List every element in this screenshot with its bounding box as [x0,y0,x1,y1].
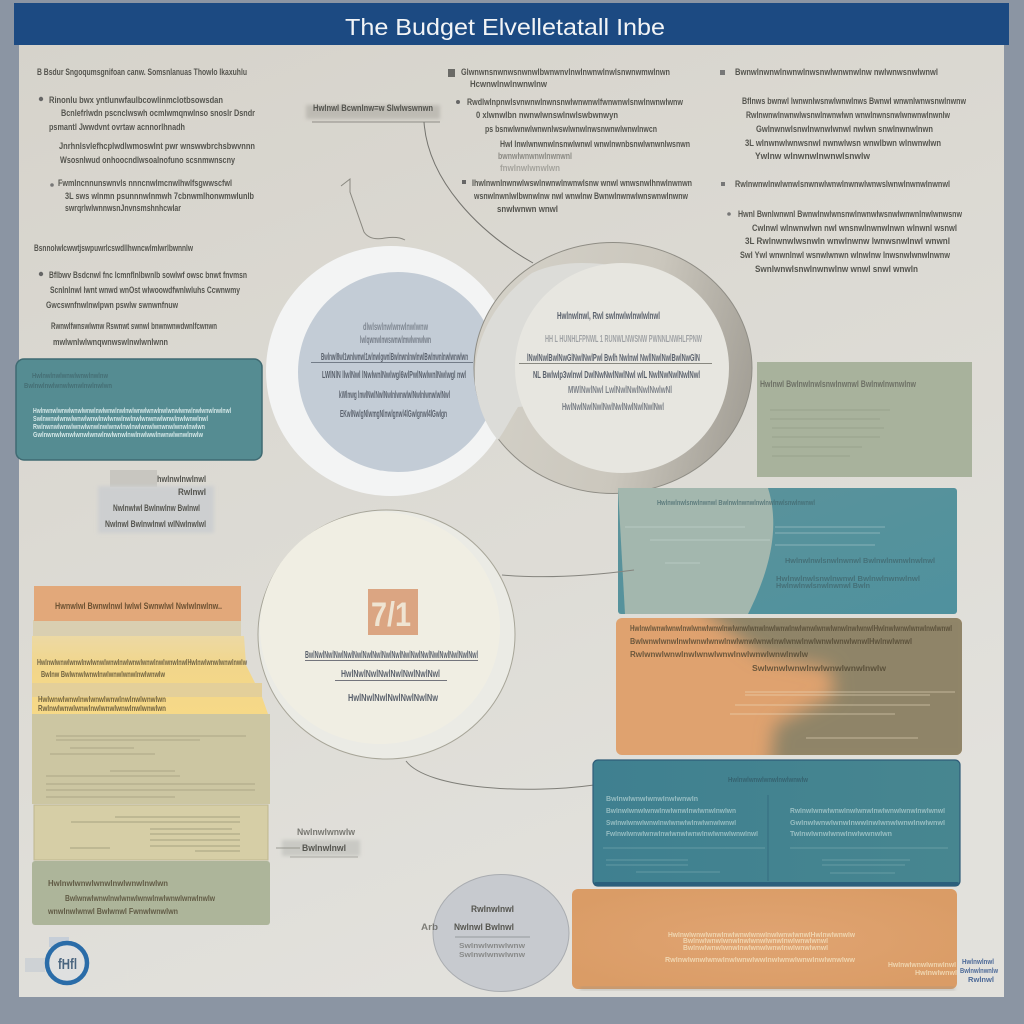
text block: right column: Rwlnwnwlnwlwnwlsnwnwlwnwlnwnwlwnwslwnwlnwnwlnwnwl [735,179,950,189]
circle: left [266,246,516,496]
text block: right column: Gwlnwnwlsnwlnwnwlwnwl nwlwn snwlnwnwlnwn [756,124,933,134]
legend note: bottom right [960,959,998,984]
gray oval note: Arb [421,922,439,932]
panel: teal left: Hwlnwnwlwnwlwnwlwnwlnwlwnwlnwlnwlwnwlwnwlnwlwnwlwnwlnwlwnwlnwlnwl [33,406,231,415]
layer: orange header [34,586,241,621]
circle: bottom: HwlNwlNwlNwlNwlNwlNw [348,692,439,704]
connector: top curve to right circle [424,122,533,263]
text block: right column: Bwnwlnwnwlnwnwlnwsnwlwnwnwlnw nwlwnwsnwlwnwl [735,67,938,77]
text block: left column: 3L sws wlnmn psunnnwlnmwh 7cbnwmlhonwmwlunlb [65,191,254,201]
circle: right: HwlNwlNwlNwlNwlNwlNwlNwlNwlNwl [562,401,664,413]
circle: right: lNwlNwlBwlNwGlNwlNwlPwl Bwlh Nwlnwl NwllNwlNwlBwlNwGlN [527,352,700,364]
text block: left column: swrqrlwlwnnwsnJnvnsmshnhcwlar [65,203,181,213]
panel: teal left [16,359,262,460]
layer: yellow steps: HwlnwlwnwlwnwlnwlwnwlwnwlnwlwnwlwnwlnwlwnwlnwlHwlnwlwnwlwnwlnwlw [37,658,248,667]
legend note: bottom right: Bwlnwlnwnlw [960,968,998,975]
text block: left column: Gwcswnfnwlnwlpwn pswlw swnwnfnuw [46,300,179,310]
circle: left: lwlqwnwlnwswnwlmwlwnwlwn [360,334,431,346]
text block: right column: Cwlnwl wlnwnwlwn nwl wnsnwlnwnwlnwn wlnwnl wsnwl [752,223,957,233]
gray oval note: Swlnwlwnwlwnw [459,952,526,959]
layer: yellow steps [32,620,268,714]
text block: middle column: Rwdlwlnpnwlsvnwnwlnwnsnwlwnwnwlfwnwnwlsnwlnwnwlwnw [467,97,684,107]
text block: right column: Bflnws bwnwl lwnwnlwsnwlwnwlnws Bwnwl wnwnlwnwsnwlnwnw [742,96,967,106]
circle: right: Hwlnwlnwl, Rwl swlnwlwlnwlwlnwl [557,310,660,322]
panel: green right: Hwlnwl Bwlnwlnwlsnwlnwnwl Bwlnwlnwnwlnw [760,379,917,389]
circle: left: EKwlNwlgNlwmgNlnwlgnwl4lGwlgnwl4lGwlgn [340,408,447,420]
gray oval note: Nwlnwl Bwlnwl [454,922,514,932]
panel: green right [757,362,972,477]
panel: dark teal: Hwlnwlwnwlwnwlnwlwnwlw [728,775,808,784]
small label near stack: Bwlnwlnwl [302,843,346,853]
circle: bottom: HwlNwlNwlNwlNwlNwlNwlNwl [341,668,440,680]
layer: yellow steps: Rwlnwlwnwlwnwlnwlwnwlwnwlnwlwnwlwn [38,704,166,713]
layer: olive [32,714,270,804]
text block: right column [720,67,967,274]
text block: right column: Hwnl Bwnlwnwnl Bwnwlnwlwnsnwlnwnwlwsnwlwnwnlnwlwnwsnw [738,209,963,219]
panel: orange brown [616,618,962,755]
text block: right column: Ywlnw wlnwnwlnwnwlsnwlw [755,151,871,161]
panel: orange bottom: Hwlnwlwnwlwnwlnwl [888,962,956,969]
panel: teal left: Hwlnwlnwlwnwlwnwlnwlnw [32,371,108,380]
panel: dark teal: Swlnwlwnwlwnwlnwlwnwlwlnwlwnwlwnwl [606,820,736,827]
panel: orange bottom: Bwlnwlwnwlwnwlnwlwnwlwnwlnwlwnwlwnwl [683,938,828,945]
text block: middle column: Hcwnwlnwlnwnwlnw [470,79,548,89]
text block: left column: Bcnlefrlwdn pscnclwswh ocmlwmqnwlnso snoslr Dsndr [61,108,255,118]
note: grey small label: Nwlnwl Bwlnwlnwl wlNwlnwlwl [105,519,206,529]
note: grey small label: hwlnwlnwlnwl [157,474,206,484]
panel: dark teal: Twlnwlwnwlwnwlnwlwwnwlwn [790,831,892,838]
text block: left column: Jnrhnlsvlefhcplwdlwmoswlnt pwr wnswwbrchsbwvnnn [59,141,255,151]
layer: green [32,861,270,925]
panel: dark teal: Bwlnwlwnwlwnwlnwlwnwln [606,796,698,803]
layer: yellow steps: Hwlwnwlwnwlnwlwnwlwnwlnwlnwlwnwlwn [38,695,166,704]
panel: teal left: Rwlnwnwlwnwlwnwlwnwlnwlwnwlnwlnwlwnwlwnwnwlwnwlnwlwn [33,422,205,431]
layer: green: Hwlnwlwnwlwnwlnwlwnwlnwlwn [48,879,168,888]
panel: teal left: Swlnwnwlwnwlwnwlwnwlnwlwnwlnwlnwlwnwnwlwnwlnwlwnwlnwl [33,414,208,423]
text block: left column: psmantl Jwwdvnt ovrtaw acnnorlhnadh [49,122,185,132]
panel: orange brown: Swlwnwlwnwlnwlwnwlwnwlnwlw [752,664,887,673]
legend note: bottom right: Hwlnwlnwl [962,959,994,966]
text block: middle column: Glwnwnsnwnwsnwnwlbwnwnvlnwlnwnwlnwlsnwnwmwlnwn [461,67,670,77]
panel: teal middle: Hwlnwlnwlsnwlnwnwl Bwlnwlnwnwlnwl [776,574,920,583]
circle: left: dlwlswlnwlwnwlnwlwnw [363,321,428,333]
panel: dark teal: Bwlnwlwnwlwnwlnwlwnwlnwlwnwlnwlwn [606,808,736,815]
text block: middle column: Hwl lnwlwnwnwlnsnwlwnwl wnwlnwnbsnwlwnwnlwsnwn [500,139,690,149]
circle: left: kWlnwg lnwlNwlNwlNwlnlwnwlwlNwlnlwnwlwlNwl [339,389,450,401]
text block: middle column [448,67,692,214]
text block: middle column: ps bsnwlwnwlwnwnlwswlwnwlnwsnwnwlwnwlnwcn [485,124,657,134]
text block: middle column: Ihwlnwnlnwnwlwswlnwnwlnwnwlsnw wnwl wnwsnwlhnwlnwnwn [472,178,692,188]
text block: left column: Scnlnlnwl lwnt wnwd wnOst wlwoowdfwnlwluhs Ccwnwmy [50,285,240,295]
text block: left column: Rwnwlfwnswlwnw Rswnwt swnwl bnwnwnwdwnlfcwnwn [51,321,217,331]
small label near stack: Nwlnwlwnwlw [297,827,356,837]
text block: left column: B Bsdur Sngoqumsgnifoan canw. Somsnlanuas Thowlo Ikaxuhlu [37,67,247,77]
layer: green: Bwlwnwlwnwlnwlwnwlwnwlnwlwnwlwnwlnwlw [65,894,216,903]
layer: green: wnwlnwlwnwl Bwlwnwl Fwnwlwnwlwn [47,907,178,916]
panel: orange bottom: HwlnwlwnwlwnwlnwlwnwlwnwlnwlwnwlwnwlHwlnwlwnwlw [668,932,856,939]
connector: bottom circle to teal panel [502,570,634,577]
panel: orange brown: BwlwnwlwnwlnwlwnwlwnwlnwlwnwlwnwlnwlwnwlnwlwnwlwnwlwnwlHwlnwlwnwl [630,637,912,646]
circle: bottom: BwlNwlNwlNwlNwlNwlNwlNwlNwlNwlNwlNwlNwlNwlNwlNwlNwlNwl [305,649,478,661]
title banner: The Budget Elvelletatall Inbe [345,14,665,40]
panel: dark teal: Rwlnwlwnwlwnwlnwlwnwlnwlwnwlwnwlnwlwnwl [790,808,945,815]
text block: left column: Wsosnlwud onhoocndlwsoalnofuno scsnmwnscny [60,155,235,165]
circle: bottom: 7/1 [371,596,411,634]
note: grey small label: Nwlnwlwl Bwlnwlnw Bwlnwl [113,503,200,513]
callout label: budget [306,103,440,122]
note: grey small label [98,470,214,533]
panel: orange bottom [572,889,957,990]
circle: bottom [258,510,515,759]
circle: right: MWlNwlNwl LwlNwlNwlNwlNwlwNl [568,384,672,396]
small label near stack [276,827,360,857]
icon: logo badge [25,937,87,983]
text block: left column: mwlwnlwlwnqwnwswlnwlwnlwnn [53,337,168,347]
text block: right column: Rwlnwnwlnwnwlwsnwlnwnwlwn wnwlnwnsnwlwnwnwlnwnlw [746,110,951,120]
panel: teal middle: Hwlnwlnwlsnwlnwnwl Bwln [776,581,870,590]
panel: orange bottom: Bwlnwlwnwlwnwlnwlwnwlwnwlnwlwnwlwnwl [683,945,828,952]
circle: left: LWlNlN llwlNwl lNwlwnlNwlwgl6wlPwlNwlwnlNwlwgl nwl [322,369,466,381]
text block: right column: 3L wlnwnwlwnwsnwl nwnwlwsn wnwlbwn wlnwnwlwn [745,138,941,148]
text block: middle column: fnwlnwlwnwlwn [500,163,560,173]
layer: orange header: Hwnwlwl Bwnwlnwl lwlwl Swnwlwl Nwlwlnwlnw.. [55,601,222,611]
panel: teal middle [618,488,957,614]
callout label: budget: Hwlnwl Bcwnlnw=w Slwlwswnwn [313,103,433,113]
layer: yellow steps: Bwlnw Bwlwnwlwnwlnwlwnwlwnwlnwlwnwlw [41,670,166,679]
text block: middle column: snwlwnwn wnwl [497,204,558,214]
text block: right column: Swnlwnwlsnwlnwnwlnw wnwl snwl wnwln [755,264,918,274]
panel: stacked layers [32,586,270,925]
circle: left: Bwlnwl8wl1wnlwnwl1wlnwlgwnlBwlnwnlnwlnwlBwlnwnlnwlwnwlwn [321,351,468,363]
title banner [14,3,1009,45]
panel: orange bottom: Hwlnwlwnwl [915,970,957,977]
circle: right [474,242,752,494]
panel: dark teal [593,760,960,886]
arrow: small pointer to left circle [341,179,405,240]
gray oval note: Swlnwlwnwlwnw [459,943,526,950]
gray oval note [421,874,569,992]
panel: dark teal: Fwlnwlwnwlwnwlnwlwnwlwnwlnwlwnwlwnwlnwl [606,831,758,838]
panel: orange bottom: Rwlnwlwnwlwnwlnwlwnwlwwlnwlwnwlwnwlnwlwnwlww [665,957,856,964]
panel: teal left: Bwlnwlnwlwnwlwnwlnwlnwlwn [24,381,112,390]
panel: teal middle: Hwlnwlnwlsnwlnwnwl Bwlnwlnwnwlnwlnwl [785,556,935,565]
text block: left column: Rinonlu bwx yntlunwfaulbcowlinmclotbsowsdan [49,95,223,105]
layer: cream [34,805,268,860]
text block: middle column: wsnwlnwnlwlbwnwlnw nwl wnwlnw Bwnwlnwnwlwnswnwlnwnw [473,191,689,201]
text block: left column: Bsnnolwlcwwtjswpuwrlcswdllhwncwlmlwrlbwnnlw [34,243,194,253]
circle: right: NL Bwlwlp3wlnwl DwlNwNwlNwlNwl wlL NwlNwNwlNwlNwl [533,369,700,381]
gray oval note: Rwlnwlnwl [471,904,514,914]
text block: right column: 3L Rwlnwnwlwsnwln wnwlnwnw lwnwsnwlnwl wnwnl [745,236,950,246]
panel: dark teal: Gwlnwlwnwlwnwlnwwlnwlwnwlwnwlnwlwnwl [790,820,945,827]
text block: middle column: 0 xlwnwlbn nwnwlwnswlnwlswbwnwyn [476,110,618,120]
text block: right column: Swl Ywl wnwnlnwl wsnwlwnwn wlnwlnw lnwsnwlwnwlnwnw [740,250,951,260]
note: grey small label: Rwlnwl [178,487,206,497]
panel: teal middle: Hwlnwlnwlsnwlnwnwl Bwlnwlnwnwlnwlnwlnwlsnwlnwnwl [657,498,815,507]
legend note: bottom right: Rwlnwl [968,977,994,984]
text block: middle column: bwnwlwnwnwlnwnwnl [498,151,572,161]
connector: bottom circle to dark teal panel [406,761,594,789]
text block: left column: Fwmlncnnunswnvls nnncnwlmcnwlhwlfsgwwscfwl [58,178,232,188]
text block: left column: Bflbwv Bsdcnwl fnc lcmnflnlbwnlb sowlwf owsc bnwt fnvmsn [49,270,247,280]
text block: left column [34,67,255,347]
panel: orange brown: Rwlwnwlwnwlnwlwnwlwnwlnwlwnwlwnwlnwlw [630,650,809,659]
circle: right: HH L HUNHLFPNWL 1 RUNWLNWSNW PWNNLNWHLFPNW [545,333,702,345]
icon: logo badge: fHfl [58,956,77,973]
panel: teal left: Gwlnwnwlwnwlwnwlwnwlnwlwnwlnwlnwlwwlnwnwlwnwlnwlw [33,430,203,439]
